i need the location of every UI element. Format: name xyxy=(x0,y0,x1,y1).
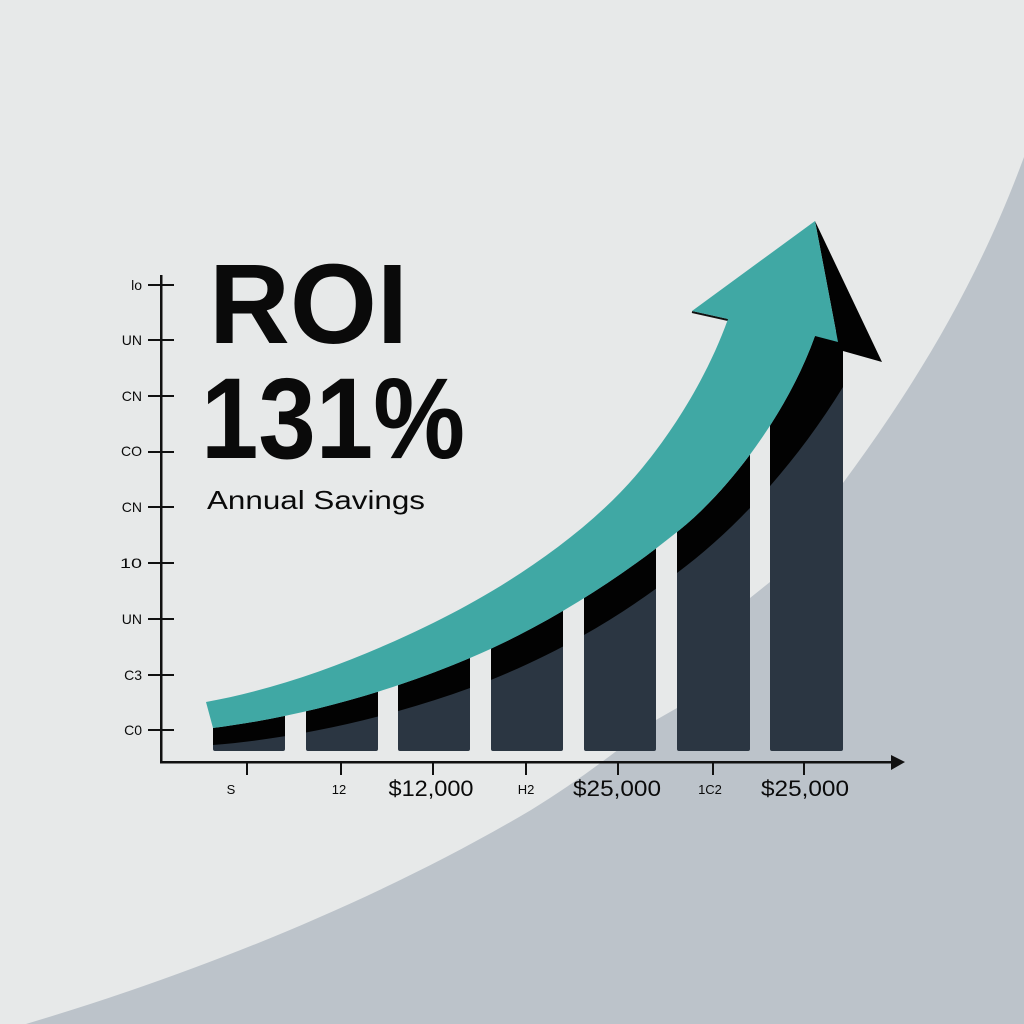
x axis xyxy=(160,755,905,801)
teal arrow xyxy=(206,221,838,728)
title: 131%: 131% xyxy=(201,355,465,483)
y axis labels: UN xyxy=(122,611,142,627)
y axis labels: CN xyxy=(122,388,142,404)
x axis labels: S xyxy=(227,782,236,797)
x axis labels: $12,000 xyxy=(388,776,474,801)
y axis labels: CN xyxy=(122,499,142,515)
x axis labels: $25,000 xyxy=(761,776,849,801)
arrowhead barb shadow xyxy=(692,312,728,320)
y axis labels xyxy=(120,277,142,738)
y axis labels: C0 xyxy=(124,722,142,738)
y axis xyxy=(120,275,174,763)
y axis labels: 10 xyxy=(120,555,142,571)
bars xyxy=(213,330,843,751)
arrowhead shadow xyxy=(815,221,882,362)
x axis labels: 1C2 xyxy=(698,782,722,797)
x axis labels: $25,000 xyxy=(573,776,661,801)
x axis labels xyxy=(227,776,849,801)
x axis labels: 12 xyxy=(332,782,346,797)
y axis labels: UN xyxy=(122,332,142,348)
x axis labels: H2 xyxy=(518,782,534,797)
y axis labels: CO xyxy=(121,443,142,459)
y axis labels: C3 xyxy=(124,667,142,683)
subtitle: Annual Savings xyxy=(207,485,425,515)
bar chart xyxy=(213,330,843,751)
y axis labels: lo xyxy=(131,277,142,293)
arrow shadow band xyxy=(213,330,843,745)
title: ROI: ROI xyxy=(209,241,408,367)
